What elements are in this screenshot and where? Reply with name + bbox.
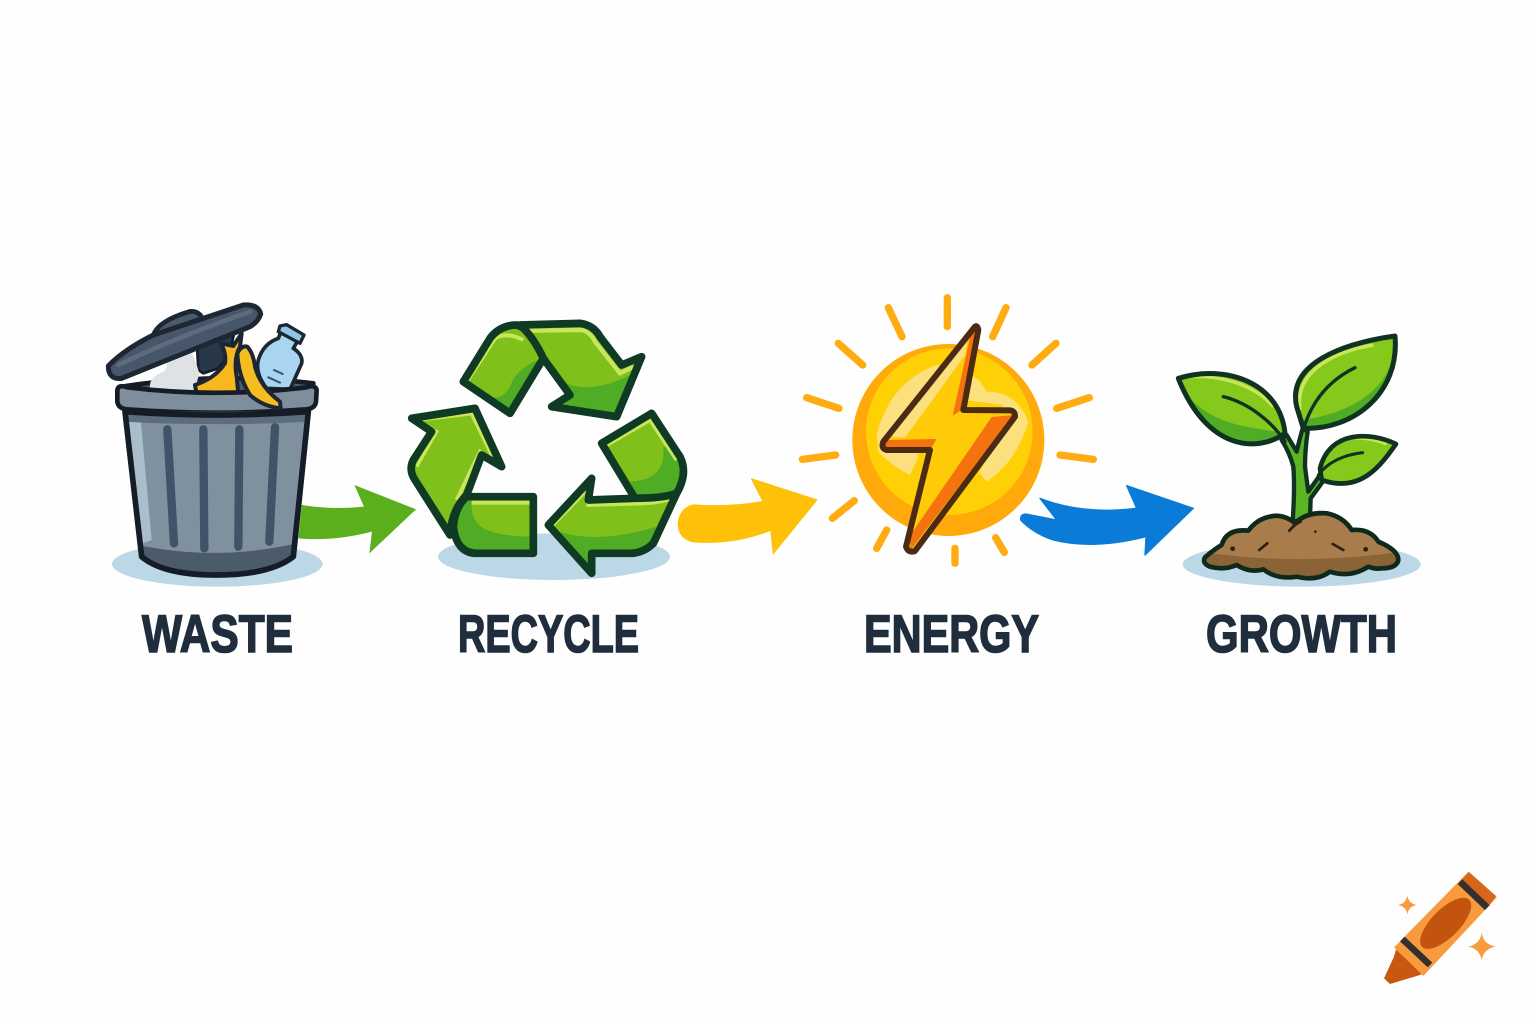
crayon bands	[1402, 882, 1487, 965]
recycle left arrow	[411, 408, 502, 535]
recycle top-left segment	[463, 325, 547, 417]
soil shadow	[1183, 542, 1421, 587]
can inner back rim	[122, 378, 313, 397]
sun disc	[852, 344, 1044, 536]
recycle bottom-left segment	[453, 497, 533, 553]
sun rays	[802, 298, 1093, 563]
can rim	[117, 386, 317, 413]
icon: recycle symbol	[411, 323, 687, 580]
left leaf	[1178, 373, 1287, 453]
soil mound	[1200, 513, 1403, 583]
plant stem	[1282, 428, 1324, 522]
arrow: blue	[1021, 486, 1193, 555]
crayon oval	[1412, 890, 1479, 957]
sparkle large	[1468, 933, 1496, 961]
icon: sun with lightning bolt	[802, 298, 1093, 563]
banana peel back	[195, 333, 242, 394]
paper trash	[150, 353, 199, 393]
can ribs	[167, 427, 275, 548]
recycle right segment	[602, 413, 687, 502]
right top leaf	[1296, 336, 1400, 433]
icon: plant sprout in soil	[1178, 336, 1421, 587]
crayon tip	[1384, 949, 1423, 984]
crayon cap	[1460, 872, 1496, 908]
recycle shadow	[438, 533, 670, 580]
arrow: yellow	[678, 479, 817, 553]
lid handle	[153, 311, 203, 335]
lid support arm	[197, 328, 235, 373]
recycle top-right arrow	[520, 323, 642, 420]
can shadow	[112, 541, 323, 587]
plastic bottle	[258, 325, 304, 389]
crayon body	[1395, 873, 1496, 975]
recycle bottom arrow	[548, 478, 677, 577]
lightning bolt	[883, 326, 1015, 552]
lid	[108, 305, 261, 379]
arrow: green	[298, 485, 416, 553]
right lower leaf	[1318, 436, 1396, 484]
label: waste: WASTE	[142, 605, 293, 664]
label: recycle: RECYCLE	[458, 605, 639, 664]
label: energy: ENERGY	[864, 605, 1039, 664]
icon: crayon watermark	[1384, 872, 1496, 984]
icon: trash can	[108, 305, 323, 587]
can body	[123, 410, 310, 583]
label: growth: GROWTH	[1206, 605, 1397, 664]
sparkle small	[1398, 896, 1417, 914]
banana peel front	[237, 346, 281, 408]
infographic: waste to growth flow	[106, 294, 1497, 984]
